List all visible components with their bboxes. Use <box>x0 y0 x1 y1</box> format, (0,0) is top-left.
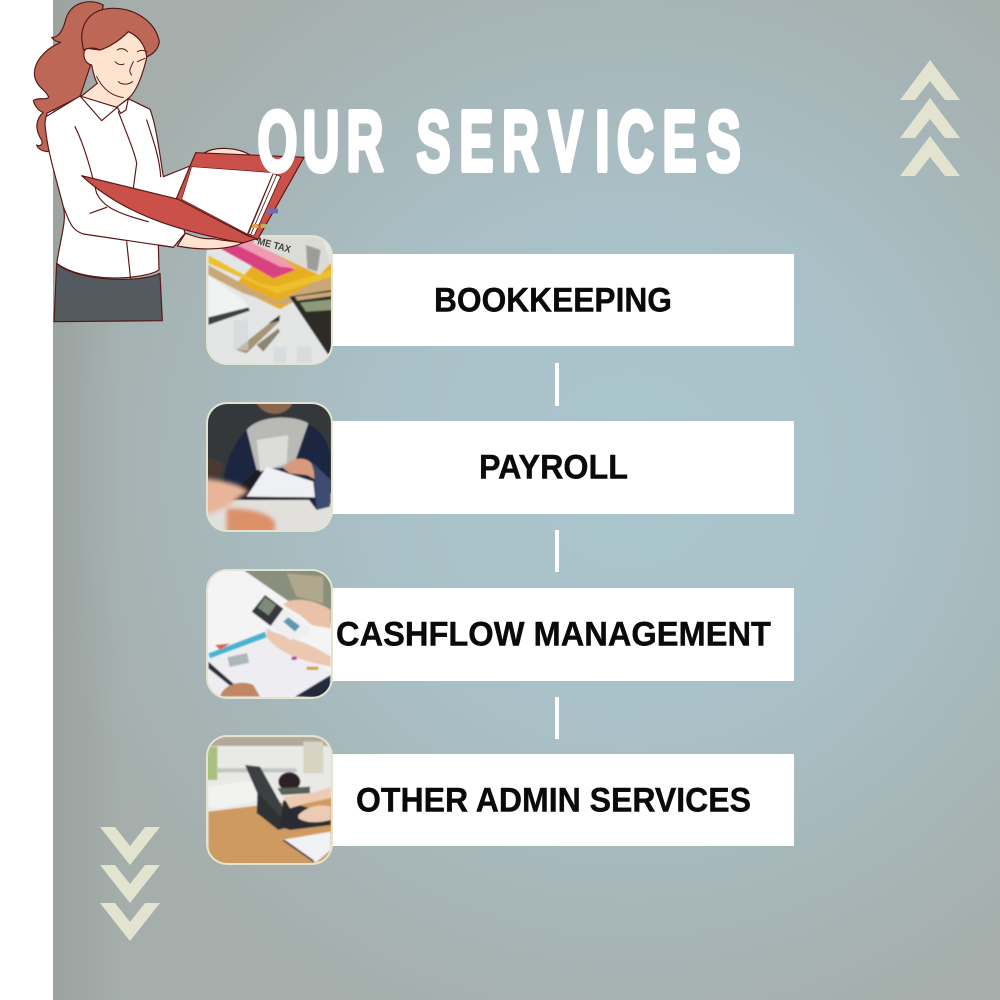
connector: cashflow to other admin <box>555 697 559 739</box>
photo: calculator and cashflow sheet <box>206 568 333 699</box>
connector: bookkeeping to payroll <box>555 363 559 406</box>
folder front cover <box>82 176 257 243</box>
icon: downward chevrons <box>100 827 160 941</box>
folder back <box>176 153 304 240</box>
service bar: other admin services: OTHER ADMIN SERVICES <box>356 782 751 820</box>
skirt <box>54 263 162 322</box>
face details <box>97 49 147 97</box>
folder pages <box>182 167 273 234</box>
hair: top <box>82 8 159 57</box>
service bar: payroll <box>330 421 794 514</box>
connector: payroll to cashflow <box>555 530 559 572</box>
tabs <box>252 209 278 228</box>
hand: lower <box>177 233 243 249</box>
hair: ponytail <box>33 2 103 152</box>
illustration: woman holding folder <box>33 2 304 322</box>
photo: tax paperwork: ME TAX <box>256 236 292 256</box>
icon: upward chevrons <box>900 60 960 176</box>
hand: upper <box>203 148 250 162</box>
service bar: bookkeeping <box>330 254 794 346</box>
service bar: bookkeeping: BOOKKEEPING <box>434 282 672 320</box>
service bar: payroll: PAYROLL <box>479 448 628 486</box>
shirt lines <box>63 96 173 280</box>
service bar: other admin services <box>330 754 794 846</box>
photo: laptop on wooden desk <box>206 735 333 865</box>
service bar: cashflow management <box>330 588 794 681</box>
service bar: cashflow management: CASHFLOW MANAGEMENT <box>336 616 771 654</box>
title: OUR SERVICES <box>258 94 741 189</box>
shirt <box>45 96 190 278</box>
photo: payroll handover <box>203 400 333 533</box>
photo: tax paperwork <box>206 233 333 367</box>
folder spine <box>248 173 281 236</box>
face and neck <box>80 32 147 107</box>
